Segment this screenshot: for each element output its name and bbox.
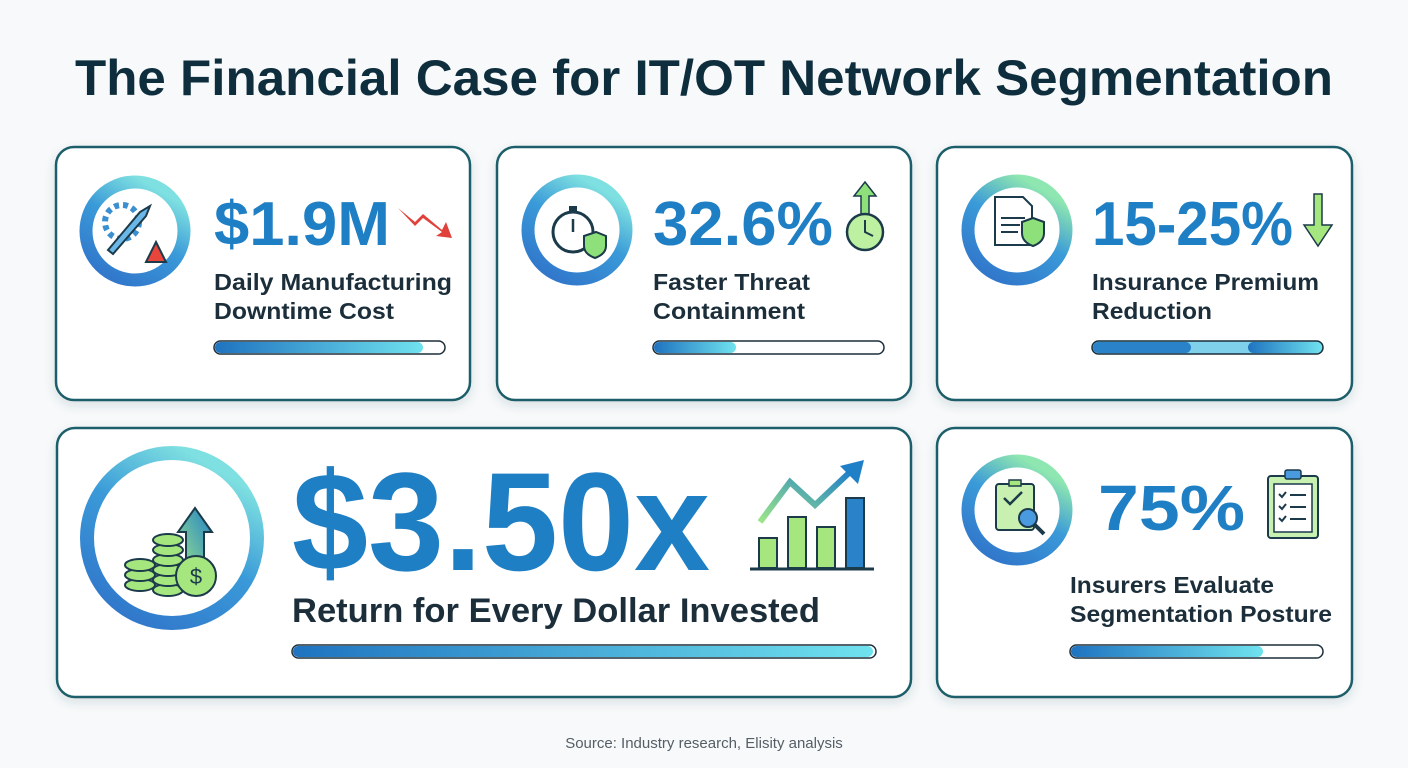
panel: insurers evaluate: Segmentation Posture — [1070, 601, 1332, 627]
label: Faster Threat — [653, 269, 810, 295]
icon: clipboard magnifier — [968, 461, 1066, 559]
stat value: $3.50x — [292, 443, 710, 600]
panel: insurance premium — [937, 147, 1352, 400]
label: Insurers Evaluate — [1070, 572, 1274, 598]
panel: downtime cost: Downtime Cost — [214, 298, 394, 324]
label: Return for Every Dollar Invested — [292, 592, 820, 630]
icon: coins up arrow: $ — [190, 564, 202, 589]
icon: gear wrench warning — [86, 182, 184, 280]
icon: stopwatch shield — [528, 181, 626, 279]
title: The Financial Case for IT/OT Network Segmentation — [75, 50, 1333, 106]
progress bar — [214, 341, 445, 354]
stat value: 15-25% — [1092, 190, 1293, 259]
panel: downtime cost — [56, 147, 470, 400]
icon: bar chart rising — [750, 460, 874, 569]
label: Insurance Premium — [1092, 269, 1319, 295]
panel: insurance premium: Reduction — [1092, 298, 1212, 324]
progress bar — [1070, 645, 1323, 658]
icon: policy shield — [968, 181, 1066, 279]
icon: checklist clipboard — [1268, 470, 1318, 538]
label: Daily Manufacturing — [214, 269, 452, 295]
panel: threat containment: Containment — [653, 298, 805, 324]
stat value: 75% — [1098, 472, 1245, 544]
icon: green down arrow — [1304, 194, 1332, 246]
panel: insurers evaluate — [937, 428, 1352, 697]
icon: red down arrow — [398, 208, 452, 238]
progress bar — [653, 341, 884, 354]
panel: ROI — [57, 428, 911, 697]
stat value: $1.9M — [214, 190, 390, 259]
progress bar — [1092, 341, 1323, 354]
icon: clock up arrow — [847, 182, 883, 250]
panel: threat containment — [497, 147, 911, 400]
stat value: 32.6% — [653, 190, 833, 259]
icon: coins up arrow — [87, 453, 257, 623]
source note: Source: Industry research, Elisity analysis — [565, 735, 843, 752]
progress bar — [292, 645, 876, 658]
